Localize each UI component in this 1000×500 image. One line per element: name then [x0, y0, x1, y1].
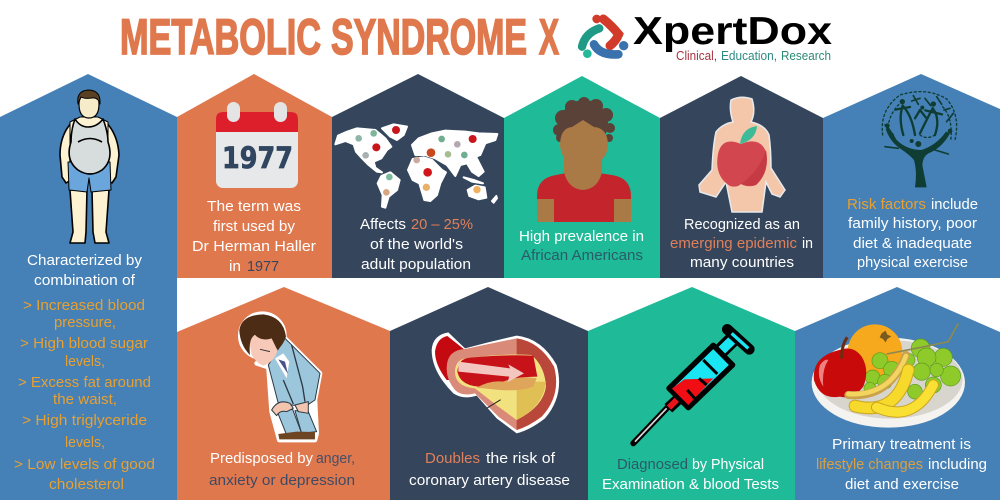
- panel: risk factors: [823, 74, 1000, 278]
- text: risk factors: diet & inadequate: [853, 235, 972, 252]
- icon: person: [537, 97, 631, 222]
- text: epidemic: emerging epidemic: [670, 235, 797, 252]
- icon: calendar: 1977: [222, 141, 293, 175]
- list of conditions: > High triglyceride: [22, 412, 147, 429]
- icon: overweight man: [60, 90, 119, 243]
- text: affects: 20 – 25%: [411, 216, 473, 233]
- text: prevalence: [519, 228, 644, 264]
- panel: African Americans: [504, 76, 660, 278]
- text: risk factors: physical exercise: [857, 254, 968, 271]
- text: characterized: [27, 252, 143, 289]
- text: epidemic: [670, 216, 813, 271]
- text: treatment: diet and exercise: [845, 476, 959, 493]
- text: diagnosed: by Physical: [692, 456, 764, 473]
- panel: affects population: [332, 74, 504, 278]
- logo tagline: Education,: [721, 48, 777, 63]
- text: predisposed: anxiety or depression: [209, 472, 355, 489]
- title: X: [539, 9, 559, 65]
- text: predisposed: Predisposed by: [210, 450, 313, 467]
- list of conditions: the waist,: [53, 391, 117, 408]
- icon: syringe: [633, 329, 749, 443]
- title: METABOLIC: [120, 9, 321, 65]
- text: predisposed: [209, 450, 355, 489]
- icon: calendar: [216, 102, 298, 188]
- title: [120, 9, 559, 65]
- text: risk factors: Risk factors: [847, 196, 926, 213]
- logo mark: [582, 15, 628, 58]
- icon: fruit plate: [812, 323, 965, 428]
- icon: clogged artery: [432, 332, 559, 433]
- text: characterized: combination of: [34, 272, 136, 289]
- list of conditions: levels,: [65, 434, 105, 451]
- text: characterized: Characterized by: [27, 252, 143, 269]
- list of conditions: pressure,: [54, 314, 116, 331]
- logo tagline: Clinical,: [676, 48, 717, 63]
- text: epidemic: many countries: [690, 254, 794, 271]
- logo tagline: Research: [781, 48, 831, 63]
- text: affects: of the world's: [370, 236, 463, 253]
- text: diagnosed: [602, 456, 779, 493]
- text: risk factors: include: [931, 196, 978, 213]
- text: diagnosed: Examination & blood Tests: [602, 476, 779, 493]
- text: doubles risk: Doubles: [425, 450, 480, 467]
- icon: world map: [335, 124, 497, 208]
- list of conditions: > Low levels of good: [14, 456, 155, 473]
- text: treatment: lifestyle changes: [816, 456, 923, 473]
- text: epidemic: in: [802, 235, 813, 252]
- list of conditions: [14, 297, 155, 493]
- text: affects: Affects: [360, 216, 406, 233]
- text: term history: [192, 198, 316, 275]
- text: epidemic: Recognized as an: [684, 216, 800, 233]
- panel: characterized by combination: [0, 74, 177, 500]
- text: affects: [360, 216, 473, 273]
- list of conditions: > High blood sugar: [20, 335, 148, 352]
- text: term history: first used by: [213, 218, 295, 235]
- list of conditions: cholesterol: [49, 476, 124, 493]
- text: prevalence: African Americans: [521, 247, 643, 264]
- text: risk factors: family history, poor: [848, 215, 977, 232]
- text: treatment: Primary treatment is: [832, 436, 971, 453]
- icon: family tree: [882, 92, 957, 187]
- icon: depressed man: [239, 314, 320, 440]
- list of conditions: levels,: [65, 353, 105, 370]
- text: treatment: including: [928, 456, 987, 473]
- logo: XpertDox: [582, 10, 832, 63]
- text: doubles risk: [409, 450, 570, 489]
- text: term history: in: [229, 258, 241, 275]
- logo wordmark: XpertDox: [633, 10, 832, 53]
- panel: emerging epidemic: [660, 76, 823, 278]
- text: risk factors: [847, 196, 978, 271]
- text: diagnosed: Diagnosed: [617, 456, 688, 473]
- panel: coronary risk: [390, 287, 588, 500]
- panel: first used 1977: [177, 74, 332, 278]
- text: predisposed: anger,: [316, 450, 355, 467]
- text: prevalence: High prevalence in: [519, 228, 644, 245]
- panel: diagnosed: [588, 287, 795, 500]
- icon: body with apple: [699, 97, 785, 212]
- list of conditions: > Increased blood: [23, 297, 145, 314]
- text: term history: The term was: [207, 198, 301, 215]
- text: affects: adult population: [361, 256, 471, 273]
- text: term history: Dr Herman Haller: [192, 238, 316, 255]
- list of conditions: > Excess fat around: [18, 374, 151, 391]
- panel: treatment: [795, 287, 1000, 500]
- panel: predisposed: [177, 287, 390, 500]
- text: treatment: [816, 436, 987, 493]
- text: doubles risk: coronary artery disease: [409, 472, 570, 489]
- text: doubles risk: the risk of: [486, 450, 556, 467]
- title: SYNDROME: [331, 9, 527, 65]
- logo tagline: [676, 48, 831, 63]
- text: term history: 1977: [247, 258, 279, 275]
